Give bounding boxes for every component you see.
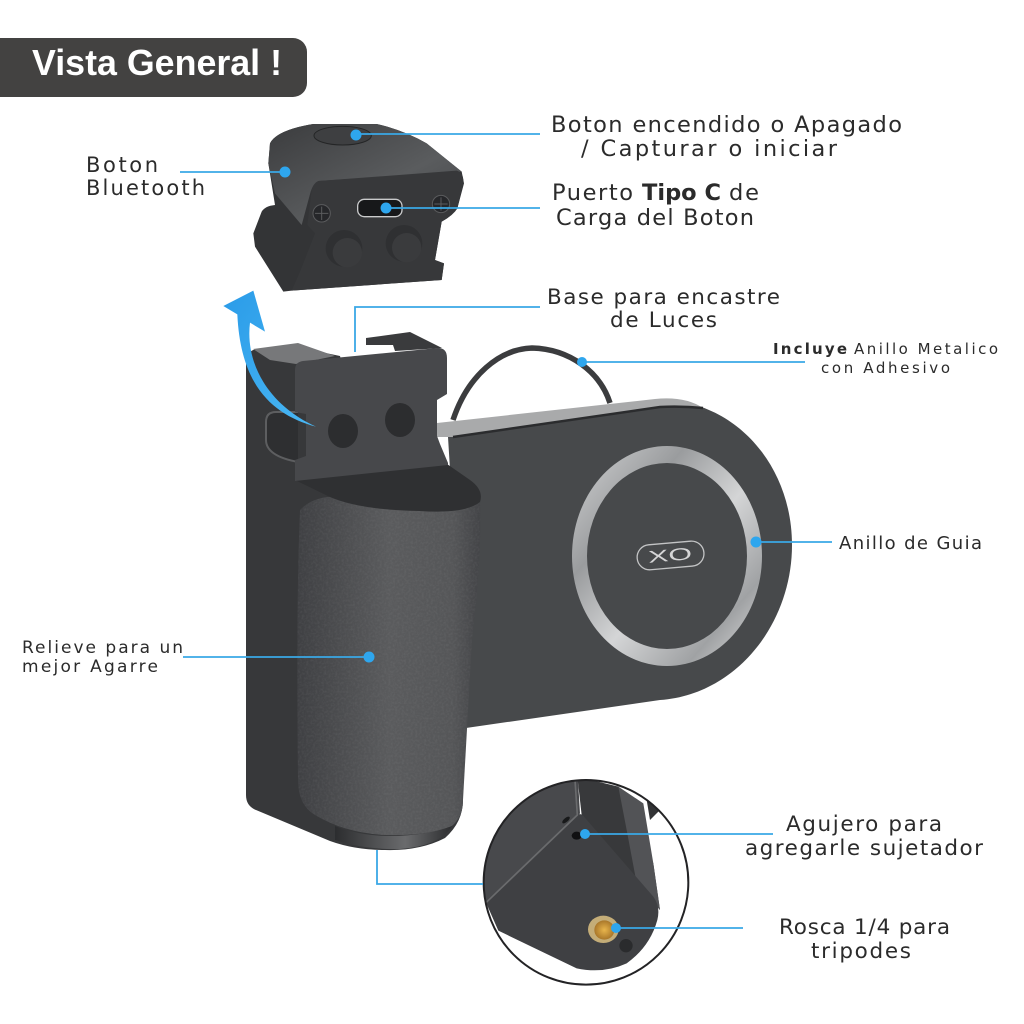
callout: tripod thread: Rosca 1/4 para: [779, 915, 950, 940]
callout: light mount base: [355, 285, 780, 352]
callout: guide ring: Anillo de Guia: [839, 533, 982, 554]
textured grip handle: [297, 497, 480, 835]
inset circle: bottom detail: [470, 770, 688, 985]
product: phone grip: [246, 332, 792, 850]
callout: USB-C port: [380, 180, 759, 231]
screws: [313, 195, 450, 222]
bracket plate with holes: [295, 348, 448, 481]
magnetic plate: [448, 400, 792, 728]
power button: [314, 126, 371, 145]
bracket shelf: [295, 464, 481, 512]
callout: power button: [350, 112, 902, 162]
blue arrow: [223, 291, 316, 427]
callout: metal ring: con Adhesivo: [821, 359, 950, 377]
module silhouette: [253, 124, 464, 292]
callout: grip relief: mejor Agarre: [22, 657, 158, 677]
metal ring cable: [453, 348, 610, 420]
callout: tripod thread: [611, 915, 950, 964]
callout: power button: / Capturar o iniciar: [581, 136, 838, 162]
brass thread: [588, 916, 619, 943]
callout: grip relief: [22, 638, 374, 677]
callout: metal ring: [577, 340, 998, 377]
guide ring: [572, 446, 762, 666]
product: bluetooth button module: [253, 124, 464, 292]
strap hole: [572, 832, 582, 840]
small screw hole: [619, 939, 633, 952]
top surface: [268, 124, 462, 225]
USB-C port: [358, 199, 402, 217]
textured strip: [618, 787, 660, 910]
callout: USB-C port: Tipo C: [642, 181, 721, 206]
callout: metal ring: Anillo Metalico: [854, 340, 998, 358]
callout: USB-C port: de: [729, 180, 759, 206]
callout: USB-C port: Carga del Boton: [556, 205, 754, 231]
bracket tabs: [253, 343, 335, 364]
callout: Boton Bluetooth: Boton: [86, 153, 158, 177]
callout: power button: Boton encendido o Apagado: [551, 112, 902, 138]
callout: strap hole: agregarle sujetador: [745, 836, 983, 861]
studs: [326, 230, 362, 267]
callout: Boton Bluetooth: [86, 153, 290, 200]
title banner: Vista General !: [32, 42, 282, 83]
side latch: [266, 412, 298, 462]
callout: light mount base: Base para encastre: [547, 285, 780, 310]
title banner: [0, 38, 307, 97]
callout: guide ring: [750, 533, 982, 554]
callout: grip relief: Relieve para un: [22, 638, 183, 658]
back plate: [246, 346, 463, 850]
plate top edge: [437, 398, 703, 437]
grip base rim: [335, 826, 452, 849]
connector: grip to inset: [377, 850, 483, 884]
callout: Boton Bluetooth: Bluetooth: [86, 176, 205, 200]
side wall: [484, 781, 580, 901]
callout: USB-C port: Puerto: [552, 180, 633, 206]
front face: [292, 171, 463, 291]
XO logo: XO: [647, 544, 693, 567]
callout: metal ring: Incluye: [773, 340, 847, 358]
callout: light mount base: de Luces: [610, 308, 717, 333]
callout: tripod thread: tripodes: [811, 939, 911, 964]
XO logo: [636, 540, 705, 571]
callout: strap hole: Agujero para: [786, 812, 942, 837]
callout: strap hole: [580, 812, 983, 861]
rear wall: [577, 777, 660, 910]
base face: [486, 814, 658, 970]
